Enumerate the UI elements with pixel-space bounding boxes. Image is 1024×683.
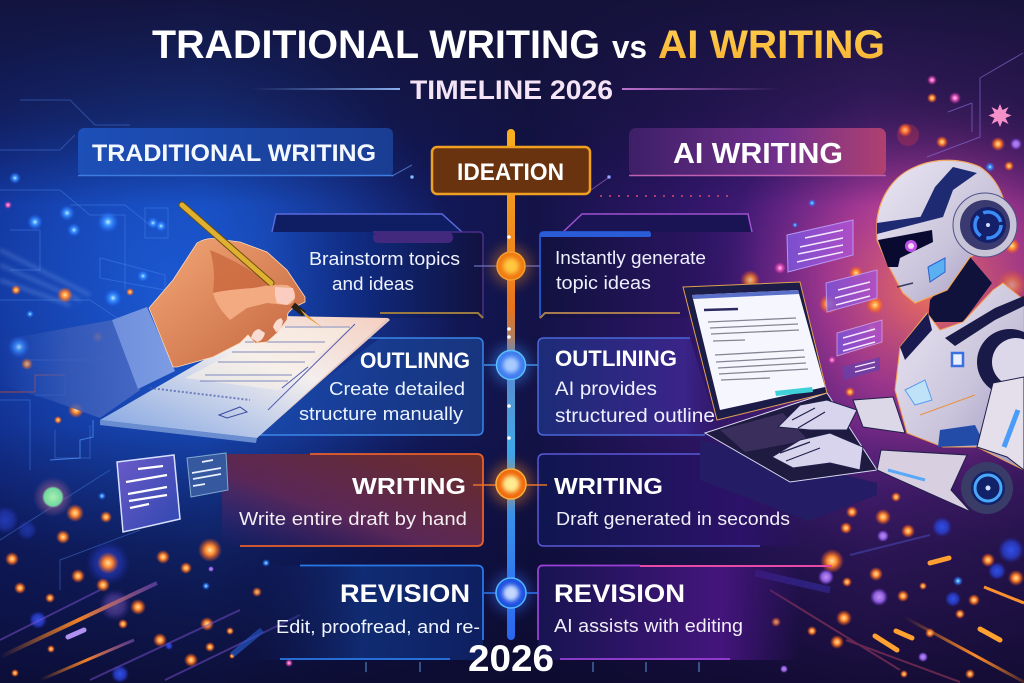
card: revision traditional: Edit, proofread, and re-	[276, 617, 480, 637]
card: outlining AI: structured outline	[555, 406, 715, 427]
card: outlining traditional: structure manually	[299, 404, 463, 424]
shirt cuff	[112, 307, 175, 389]
icon: robot at laptop	[683, 160, 1024, 521]
robot head	[877, 160, 1008, 303]
card: outlining traditional: Create detailed	[329, 379, 465, 399]
title: TRADITIONAL WRITING	[152, 23, 600, 67]
robot neck	[928, 257, 992, 322]
node: revision	[484, 573, 538, 613]
card: writing AI	[538, 454, 808, 546]
card: revision AI: AI assists with editing	[554, 616, 743, 636]
subtitle: TIMELINE 2026	[410, 75, 613, 105]
card: ideation AI	[540, 214, 762, 318]
forearm upper	[853, 397, 905, 433]
ideation label: IDEATION	[457, 159, 564, 186]
card: outlining AI: AI provides	[555, 379, 657, 400]
node: writing	[473, 463, 547, 505]
card: outlining AI	[538, 338, 720, 435]
card: revision traditional: REVISION	[340, 580, 470, 608]
timeline spine	[507, 129, 515, 640]
title: vs	[612, 29, 647, 65]
laptop pedestal	[700, 440, 877, 521]
robot ear headset	[953, 193, 1017, 257]
upper arm	[977, 377, 1024, 470]
hand	[149, 238, 305, 367]
forearm lower	[877, 450, 1013, 514]
card: outlining traditional	[250, 338, 483, 435]
card: writing traditional: Write entire draft by hand	[239, 509, 467, 529]
card: ideation traditional	[268, 214, 483, 318]
header: traditional writing: TRADITIONAL WRITING	[92, 140, 376, 167]
card: outlining AI: OUTLINING	[555, 346, 677, 371]
card: ideation traditional: Brainstorm topics	[309, 249, 460, 269]
card: revision traditional	[240, 565, 483, 660]
header: AI writing	[629, 128, 886, 176]
card: revision AI	[538, 565, 832, 660]
header: traditional writing	[78, 128, 393, 176]
finger shadow	[210, 250, 270, 293]
icon: writing hand with pencil and paper	[0, 205, 390, 443]
thumb	[213, 285, 295, 320]
notepad	[100, 316, 390, 443]
title	[152, 23, 885, 67]
year label: 2026	[468, 638, 554, 679]
card: ideation traditional: and ideas	[332, 274, 414, 294]
sleeve	[0, 320, 140, 418]
robot hands	[772, 400, 863, 470]
robot body	[895, 283, 1024, 470]
ideation label	[432, 147, 590, 194]
icon: floating documents left	[117, 453, 228, 532]
card: writing traditional: WRITING	[352, 473, 466, 499]
thumb nail	[275, 287, 295, 305]
card: writing AI: WRITING	[554, 473, 663, 499]
card: writing traditional	[222, 454, 483, 546]
bottom light streaks	[0, 535, 1024, 682]
title: AI WRITING	[658, 23, 885, 67]
arm light strip	[1004, 410, 1018, 447]
connector dots	[392, 165, 730, 196]
card: ideation AI: Instantly generate	[555, 248, 706, 268]
card: revision AI: REVISION	[554, 580, 685, 608]
icon: floating panels right	[787, 220, 882, 380]
pencil	[182, 205, 323, 328]
header: AI writing: AI WRITING	[673, 138, 843, 170]
card: outlining traditional: OUTLINNG	[360, 348, 470, 373]
node: ideation	[474, 246, 540, 286]
card: writing AI: Draft generated in seconds	[556, 509, 790, 529]
node: outlining	[484, 345, 538, 385]
laptop	[683, 282, 877, 482]
card: ideation AI: topic ideas	[556, 273, 651, 293]
finger nails	[251, 318, 283, 342]
